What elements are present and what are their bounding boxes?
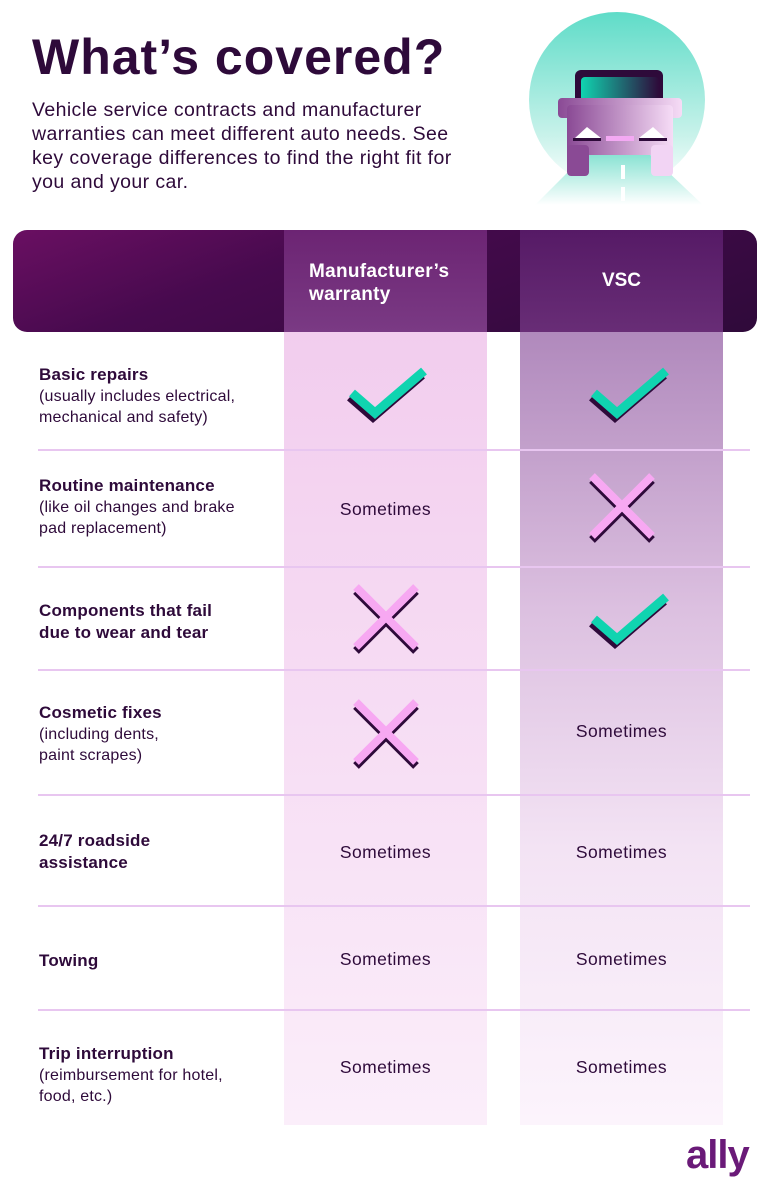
text: Cosmetic fixes	[39, 703, 162, 722]
icon: cross (VSC, maintenance)	[589, 473, 655, 543]
intro text: Vehicle service contracts and manufacturer	[32, 99, 422, 121]
icon: cross (manufacturer, wear)	[353, 584, 419, 654]
row labels: Basic repairs	[39, 365, 148, 384]
text: Components that fail	[39, 601, 212, 620]
text: sometimes cells: Sometimes	[576, 1057, 667, 1077]
text: sometimes cells: Sometimes	[340, 1057, 431, 1077]
intro text	[32, 99, 452, 193]
text: sometimes cells: Sometimes	[576, 721, 667, 741]
column: manufacturer's warranty	[284, 230, 487, 1125]
icon: check (VSC, wear)	[589, 594, 669, 649]
text: (like oil changes and brake	[39, 499, 235, 516]
row labels: mechanical and safety)	[39, 409, 208, 426]
text: 24/7 roadside	[39, 831, 150, 850]
row labels	[39, 365, 235, 426]
text: sometimes cells: Sometimes	[576, 842, 667, 862]
title: What’s covered?	[32, 29, 445, 85]
text: food, etc.)	[39, 1088, 112, 1105]
text: Towing	[39, 951, 98, 970]
text: pad replacement)	[39, 520, 167, 537]
text: sometimes cells: Sometimes	[340, 949, 431, 969]
text: (including dents,	[39, 726, 159, 743]
heading: manufacturer's warranty: Manufacturer’s	[309, 261, 449, 282]
icon: check (manufacturer, basic repairs)	[347, 368, 427, 423]
logo: ally: ally	[686, 1133, 749, 1177]
intro text: warranties can meet different auto needs. See	[32, 123, 449, 145]
heading: manufacturer's warranty: warranty	[309, 284, 391, 305]
text: paint scrapes)	[39, 747, 142, 764]
text: (reimbursement for hotel,	[39, 1067, 223, 1084]
text: Trip interruption	[39, 1044, 174, 1063]
text: due to wear and tear	[39, 623, 208, 642]
heading: VSC: VSC	[602, 270, 641, 291]
row labels: (usually includes electrical,	[39, 388, 235, 405]
text: sometimes cells: Sometimes	[340, 842, 431, 862]
text: assistance	[39, 853, 128, 872]
icon: cross (manufacturer, cosmetic)	[353, 699, 419, 769]
icon: check (VSC, basic repairs)	[589, 368, 669, 423]
header bar	[13, 230, 757, 332]
text: sometimes: Sometimes	[340, 499, 431, 519]
column: VSC	[520, 230, 723, 1125]
text: sometimes cells: Sometimes	[576, 949, 667, 969]
intro text: key coverage differences to find the right fit for	[32, 147, 452, 169]
intro text: you and your car.	[32, 171, 188, 193]
text: Routine maintenance	[39, 476, 215, 495]
icon: car on road	[529, 12, 705, 202]
heading: manufacturer's warranty	[309, 261, 449, 305]
